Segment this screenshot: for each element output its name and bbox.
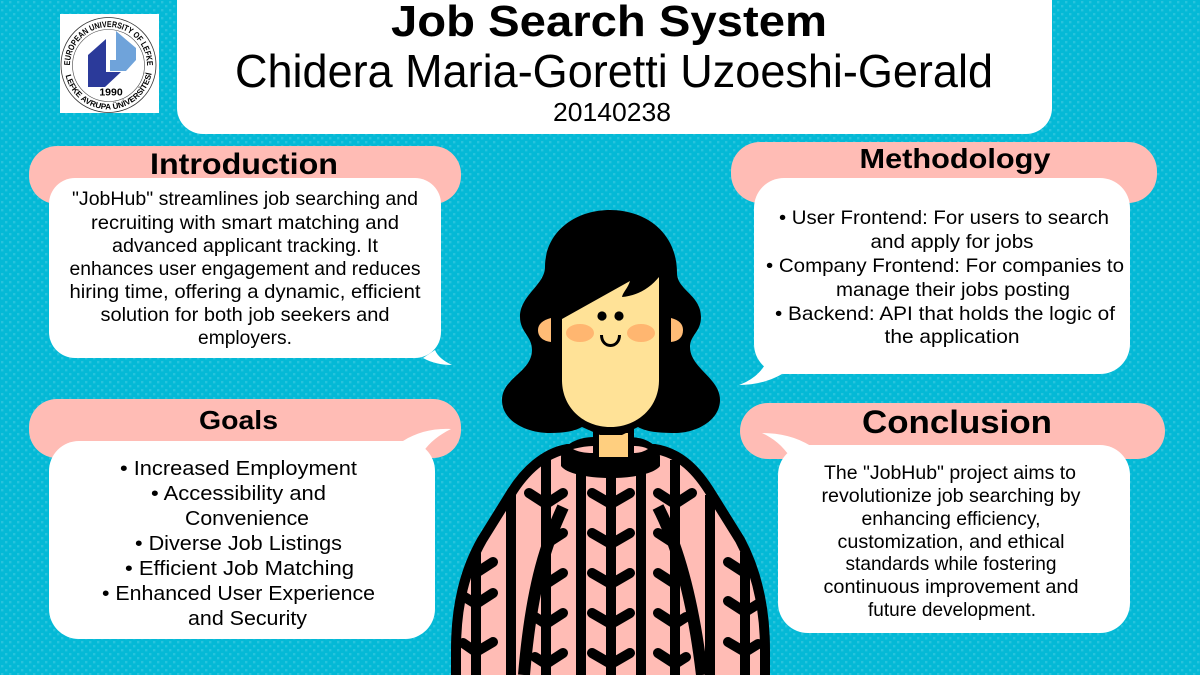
text: methodology (766, 207, 1124, 348)
text: conclusion: standards while fostering (846, 553, 1056, 575)
sweater (456, 449, 765, 675)
text: introduction (70, 188, 421, 349)
text: introduction: employers. (198, 327, 292, 349)
text: introduction: recruiting with smart matching and (91, 212, 399, 234)
cheeks (566, 324, 655, 342)
text: goals: • Efficient Job Matching (125, 558, 354, 580)
text: methodology: and apply for jobs (870, 231, 1034, 253)
panel: conclusion (740, 403, 1165, 633)
text: goals: and Security (188, 608, 307, 630)
university logo (60, 14, 159, 113)
heading: introduction: Introduction (150, 148, 338, 181)
text: conclusion: revolutionize job searching by (822, 485, 1081, 507)
text: goals: • Enhanced User Experience (102, 583, 375, 605)
ears (538, 318, 683, 342)
university logo: 1990 (99, 86, 123, 98)
panel: introduction (29, 146, 461, 365)
university logo: EUROPEAN UNIVERSITY OF LEFKE (64, 21, 153, 66)
text: goals (102, 458, 375, 630)
figure: woman in striped sweater (456, 210, 765, 675)
text: introduction: advanced applicant tracking. It (112, 235, 379, 257)
student number: 20140238 (553, 97, 671, 127)
text: goals: • Diverse Job Listings (135, 533, 342, 555)
university logo: LEFKE AVRUPA ÜNİVERSİTESİ (66, 72, 152, 110)
collar (561, 425, 660, 478)
text: conclusion: The "JobHub" project aims to (824, 462, 1076, 484)
text: methodology: the application (884, 326, 1020, 348)
panel: goals (29, 399, 461, 639)
panel: methodology (731, 142, 1157, 385)
text: conclusion (822, 462, 1081, 621)
smile (602, 335, 620, 346)
hair (502, 210, 720, 435)
text: goals: • Increased Employment (120, 458, 357, 480)
author name: Chidera Maria-Goretti Uzoeshi-Gerald (235, 45, 993, 97)
text: introduction: solution for both job seekers and (100, 304, 390, 326)
text: conclusion: customization, and ethical (838, 531, 1064, 553)
text: conclusion: enhancing efficiency, (862, 508, 1040, 530)
text: introduction: enhances user engagement and reduces (70, 258, 421, 280)
text: methodology: manage their jobs posting (836, 279, 1070, 301)
text: methodology: • User Frontend: For users to search (779, 207, 1109, 229)
heading: goals: Goals (199, 405, 278, 435)
heading: conclusion: Conclusion (862, 404, 1052, 440)
eyes (597, 311, 624, 321)
face (562, 277, 659, 427)
neck (599, 433, 628, 457)
heading: methodology: Methodology (860, 143, 1051, 174)
text: methodology: • Backend: API that holds the logic of (775, 303, 1116, 325)
text: introduction: hiring time, offering a dynamic, efficient (70, 281, 421, 303)
text: conclusion: future development. (868, 599, 1036, 621)
text: goals: Convenience (185, 508, 309, 530)
header panel (177, 0, 1052, 134)
text: conclusion: continuous improvement and (824, 576, 1078, 598)
text: methodology: • Company Frontend: For companies to (766, 255, 1124, 277)
text: goals: • Accessibility and (151, 483, 326, 505)
text: introduction: "JobHub" streamlines job searching and (72, 188, 418, 210)
